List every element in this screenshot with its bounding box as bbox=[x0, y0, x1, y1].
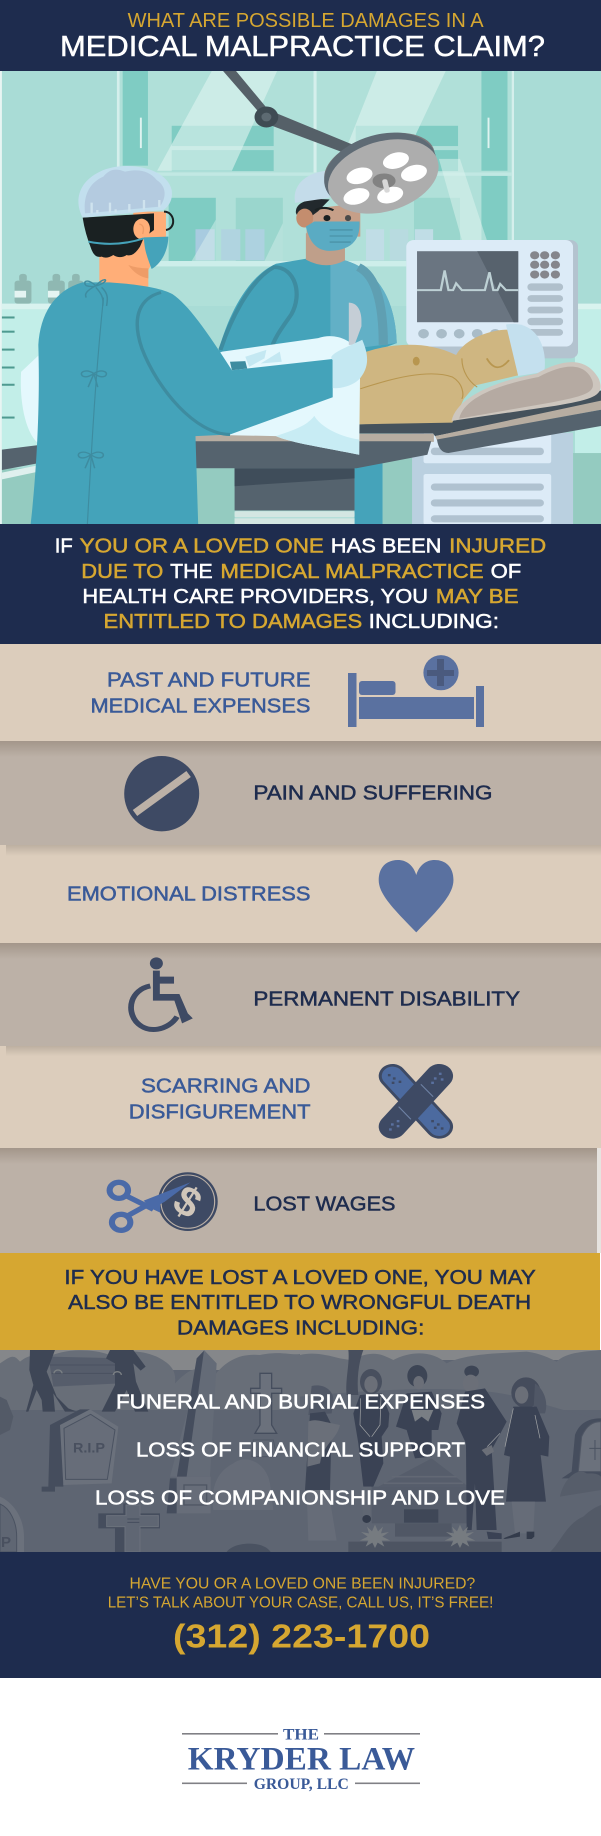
icon: heart bbox=[379, 860, 453, 932]
intro text: INJURED bbox=[449, 536, 546, 558]
label: permanent disability: PERMANENT DISABILITY bbox=[253, 989, 520, 1011]
list of wrongful death damages: LOSS OF COMPANIONSHIP AND LOVE bbox=[95, 1488, 505, 1510]
call to action: HAVE YOU OR A LOVED ONE BEEN INJURED? bbox=[130, 1575, 476, 1592]
cross lower bbox=[98, 1503, 160, 1552]
callout text bbox=[64, 1267, 536, 1340]
callout text: IF YOU HAVE LOST A LOVED ONE, YOU MAY bbox=[64, 1267, 536, 1289]
bottom grave arc bbox=[227, 1544, 271, 1552]
logo: kryder law: KRYDER LAW bbox=[188, 1741, 415, 1777]
bush bottom right bbox=[550, 1505, 601, 1552]
list of wrongful death damages: FUNERAL AND BURIAL EXPENSES bbox=[116, 1392, 485, 1414]
icon: pill bbox=[124, 756, 199, 831]
illustration: operating room bbox=[0, 68, 601, 527]
panel: pain and suffering bbox=[0, 741, 601, 845]
intro text: OF bbox=[491, 561, 521, 583]
panel: past and future medical expenses bbox=[0, 644, 601, 741]
callout text: ALSO BE ENTITLED TO WRONGFUL DEATH bbox=[68, 1292, 531, 1314]
front surgeon head bbox=[78, 166, 173, 287]
title: main line: MEDICAL MALPRACTICE CLAIM? bbox=[60, 31, 545, 63]
back surgeon bbox=[218, 171, 397, 358]
label: lost wages: LOST WAGES bbox=[253, 1194, 396, 1216]
obelisk bbox=[170, 1350, 217, 1477]
surgical lamp bbox=[255, 107, 451, 227]
gravestone letter: P bbox=[1, 1534, 11, 1551]
list of wrongful death damages bbox=[95, 1392, 505, 1510]
panel: scarring and disfigurement bbox=[0, 1046, 601, 1148]
mourners bbox=[305, 1365, 549, 1541]
intro text: THE bbox=[170, 561, 213, 583]
surgical lamp arm bbox=[222, 69, 355, 155]
list of wrongful death damages: LOSS OF FINANCIAL SUPPORT bbox=[136, 1440, 465, 1462]
label: medical expenses: PAST AND FUTURE bbox=[107, 670, 310, 692]
intro text: ENTITLED TO DAMAGES bbox=[104, 611, 362, 633]
logo: group llc: GROUP, LLC bbox=[254, 1776, 349, 1793]
intro text: HEALTH CARE PROVIDERS, YOU bbox=[82, 586, 428, 608]
label: medical expenses bbox=[90, 670, 310, 718]
call to action: LET’S TALK ABOUT YOUR CASE, CALL US, IT’S FREE! bbox=[108, 1594, 493, 1611]
cemetery scene left bbox=[0, 1350, 302, 1552]
callout text: DAMAGES INCLUDING: bbox=[177, 1318, 424, 1340]
front surgeon gown bbox=[31, 280, 367, 524]
monitor bbox=[406, 240, 578, 358]
panel: emotional distress bbox=[0, 845, 601, 943]
gravestone inscription: R.I.P bbox=[73, 1440, 105, 1456]
operating table bbox=[2, 391, 601, 524]
label: emotional distress: EMOTIONAL DISTRESS bbox=[67, 884, 310, 906]
flowers bbox=[360, 1525, 390, 1548]
panel: lost wages bbox=[0, 1148, 601, 1253]
coffin and bearers bbox=[26, 1350, 148, 1412]
panel: permanent disability bbox=[0, 943, 601, 1046]
logo bbox=[182, 1726, 420, 1793]
panel: wrongful death scene bbox=[0, 1350, 601, 1552]
intro text: YOU OR A LOVED ONE bbox=[80, 536, 324, 558]
label: scarring and disfigurement bbox=[129, 1076, 310, 1123]
intro text: HAS BEEN bbox=[331, 536, 442, 558]
intro text: DUE TO bbox=[81, 561, 163, 583]
call to action bbox=[108, 1575, 493, 1611]
intro text: IF bbox=[55, 536, 73, 558]
icon: crossed bandages bbox=[388, 1073, 443, 1131]
intro text bbox=[55, 536, 546, 633]
title band bbox=[0, 0, 601, 71]
phone number: (312) 223-1700 bbox=[173, 1618, 430, 1655]
intro band background bbox=[0, 524, 601, 644]
equipment cabinet bbox=[412, 433, 573, 525]
gravestone right bbox=[560, 1418, 601, 1497]
label: scarring and disfigurement: SCARRING AND bbox=[141, 1076, 310, 1098]
intro text: INCLUDING: bbox=[369, 611, 499, 633]
label: medical expenses: MEDICAL EXPENSES bbox=[90, 696, 310, 718]
gravestone left bbox=[0, 1497, 24, 1552]
scalpel bbox=[349, 303, 361, 345]
cemetery scene right bbox=[300, 1350, 601, 1552]
label: scarring and disfigurement: DISFIGUREMENT bbox=[129, 1101, 310, 1123]
patient bbox=[356, 324, 601, 424]
logo: the: THE bbox=[283, 1726, 319, 1743]
gold callout bbox=[0, 1253, 600, 1350]
intro text: MAY BE bbox=[436, 586, 519, 608]
label: pain and suffering: PAIN AND SUFFERING bbox=[253, 782, 492, 804]
title: question line: WHAT ARE POSSIBLE DAMAGES IN A bbox=[128, 10, 484, 32]
sheet bbox=[195, 336, 360, 455]
cross upright bbox=[251, 1373, 282, 1457]
grave mound bbox=[348, 1458, 502, 1552]
icon: scissors cutting coin: $ bbox=[165, 1175, 210, 1228]
icon: scissors cutting coin bbox=[110, 1172, 218, 1231]
icon: wheelchair bbox=[131, 957, 193, 1029]
left pillow sheet bbox=[21, 356, 43, 446]
contact panel bbox=[0, 1552, 601, 1678]
icon: hospital bed bbox=[348, 655, 484, 727]
intro text: MEDICAL MALPRACTICE bbox=[220, 561, 484, 583]
gravestone: R.I.P bbox=[42, 1409, 118, 1492]
